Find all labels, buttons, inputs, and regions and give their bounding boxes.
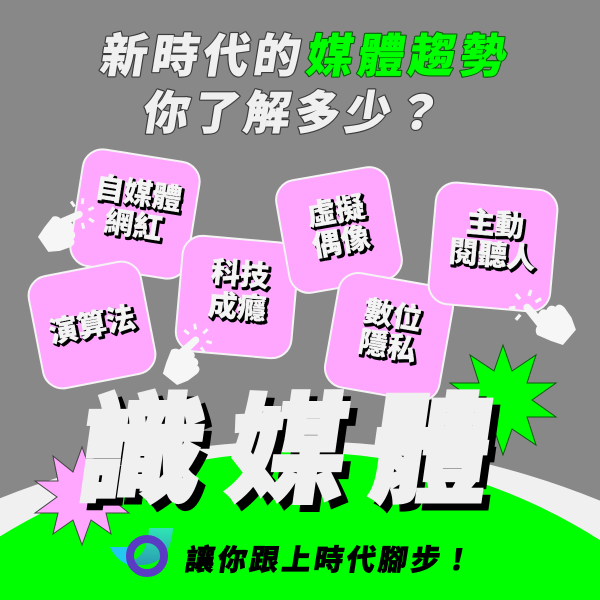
- card: 主動閱聽人: 主動: [465, 206, 525, 244]
- card: 數位隱私: 隱私: [358, 327, 420, 370]
- main title shadow: 體: [369, 394, 506, 525]
- card: 主動閱聽人: 閱聽人: [449, 237, 539, 278]
- card: 主動閱聽人: [427, 181, 559, 313]
- card: 自媒體網紅: [67, 146, 203, 282]
- card: 數位隱私: 數位: [363, 296, 426, 339]
- main title: 識: [70, 385, 213, 517]
- green starburst: [450, 345, 556, 455]
- card: 虛擬偶像: [273, 164, 405, 296]
- icon: logo: [110, 528, 173, 573]
- heading line 2: 你了解多少？: [139, 87, 450, 139]
- icon: hand tapping card 3: [151, 318, 225, 391]
- main title shadow: 識: [77, 392, 220, 524]
- heading: [97, 30, 516, 139]
- card: 數位隱私: [322, 270, 456, 404]
- main title: 媒: [220, 387, 357, 518]
- white horizon band: [0, 441, 600, 600]
- card: 自媒體網紅: 自媒體: [93, 171, 184, 217]
- main title shadow: [77, 392, 506, 525]
- icon: hand tapping card 1: [30, 194, 105, 258]
- heading line 1 green: 媒體趨勢: [303, 30, 516, 82]
- heading line 2: 你了解多少？: [139, 87, 450, 139]
- green globe: [0, 452, 600, 600]
- card: 科技成癮: [174, 234, 300, 360]
- main title: 體: [362, 387, 499, 518]
- heading line 1 green: 媒體趨勢: [303, 30, 516, 82]
- main title shadow: 媒: [227, 394, 364, 525]
- card: 演算法: 演算法: [48, 302, 140, 352]
- card: 自媒體網紅: 網紅: [102, 205, 164, 246]
- card: 主動閱聽人: 閱聽人: [447, 235, 537, 276]
- card: 數位隱私: 隱私: [356, 325, 419, 368]
- card: 科技成癮: 成癮: [209, 290, 269, 329]
- card: 自媒體網紅: 自媒體: [94, 173, 185, 219]
- tagline: 讓你跟上時代腳步！: [183, 543, 478, 577]
- main title: [70, 385, 499, 518]
- card: 虛擬偶像: 偶像: [310, 221, 373, 264]
- heading line 1 white: 新時代的: [97, 30, 310, 82]
- card: 虛擬偶像: 偶像: [312, 223, 375, 265]
- icon: hand tapping card 6: [503, 276, 582, 358]
- card: 演算法: 演算法: [46, 300, 138, 350]
- card: 自媒體網紅: 網紅: [104, 207, 166, 248]
- card: 科技成癮: 科技: [211, 258, 272, 296]
- card: 科技成癮: 成癮: [207, 288, 268, 327]
- heading line 1 white: 新時代的: [97, 30, 310, 82]
- card: 主動閱聽人: 主動: [466, 208, 527, 246]
- card: 虛擬偶像: 虛擬: [304, 190, 367, 233]
- card: 虛擬偶像: 虛擬: [307, 192, 370, 235]
- card: 科技成癮: 科技: [210, 256, 270, 294]
- card: 演算法: [25, 258, 159, 392]
- pink starburst: [35, 447, 129, 545]
- card: 數位隱私: 數位: [361, 294, 424, 337]
